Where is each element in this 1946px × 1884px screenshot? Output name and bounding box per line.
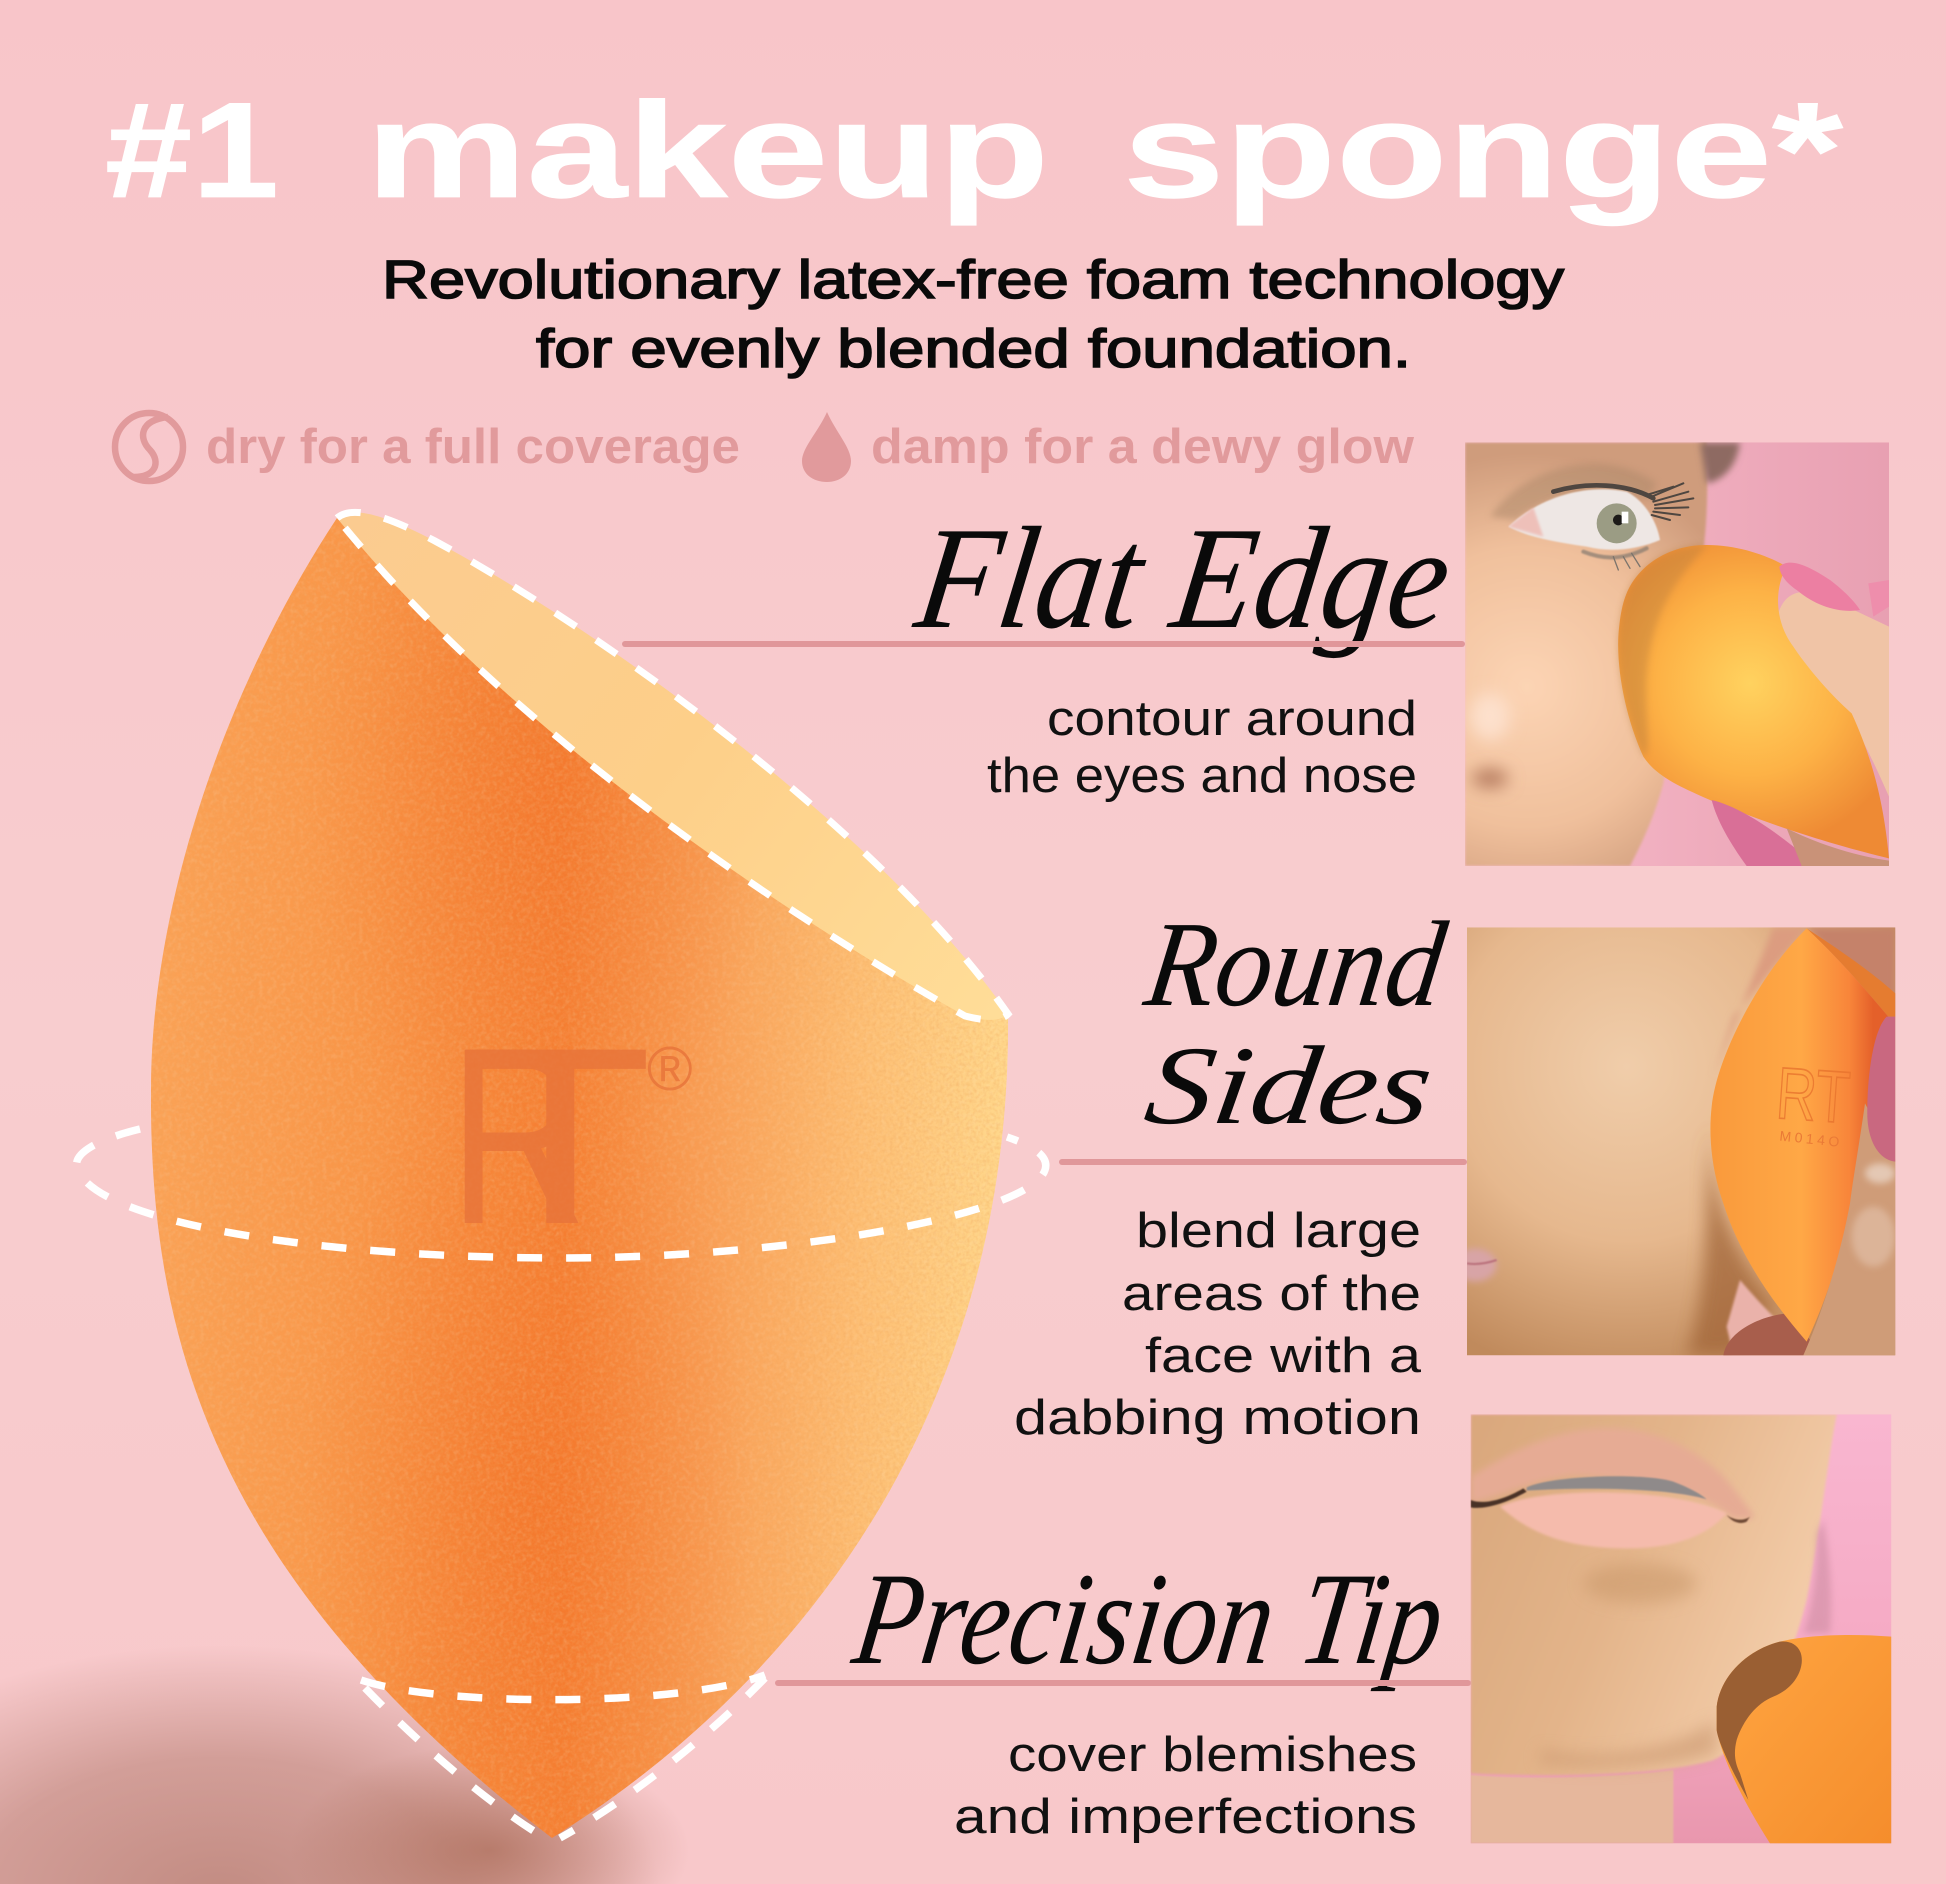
sponge (1618, 545, 1889, 858)
usage tip: dry: dry for a full coverage (206, 420, 740, 474)
flat cut face (337, 512, 1008, 1020)
connector line (622, 641, 1465, 647)
usage tip: damp: damp for a dewy glow (871, 420, 1415, 474)
sponge (1710, 928, 1888, 1342)
connector line (775, 1680, 1471, 1686)
usage tip: dry (115, 413, 740, 481)
nails (1779, 563, 1860, 611)
connector line (1059, 1159, 1467, 1165)
icon: dry sponge circle (115, 413, 183, 481)
face (1471, 1414, 1837, 1775)
usage tip: damp (802, 412, 1415, 482)
sponge shadow (0, 1630, 900, 1884)
lower lip (1500, 1492, 1727, 1548)
icon: water drop (802, 412, 851, 482)
description: face with a (1145, 1329, 1422, 1383)
fingertip (1723, 1313, 1813, 1355)
sponge logo: RT (1774, 1052, 1853, 1139)
description: and imperfections (954, 1790, 1417, 1844)
foundation stain (1717, 1641, 1802, 1800)
RT logo: T (468, 995, 653, 1276)
thumb (1803, 1103, 1895, 1355)
description: cover blemishes (1008, 1728, 1417, 1782)
description: areas of the (1122, 1267, 1421, 1321)
heading: Precision Tip: Precision Tip (845, 1546, 1453, 1692)
sponge back facet (1807, 928, 1895, 1017)
title: makeup (366, 74, 1049, 226)
sponge (1717, 1635, 1891, 1843)
sponge body (140, 510, 1020, 1850)
RT logo: ® (647, 1035, 693, 1104)
photo: eye contour (1465, 442, 1889, 866)
heading: Round Sides (1137, 897, 1454, 1148)
title: #1 (105, 74, 279, 226)
dashed outline: round sides (77, 1129, 1046, 1258)
lip (1467, 1246, 1500, 1285)
eyelashes (1553, 483, 1693, 570)
description: dabbing motion (1014, 1391, 1421, 1445)
description: blend large (1136, 1204, 1421, 1258)
callout: flat edge (622, 497, 1465, 803)
description (987, 692, 1417, 803)
sponge illustration (77, 510, 1046, 1850)
teeth and mouth line (1527, 1476, 1707, 1499)
dashed outline: flat edge (337, 512, 1008, 1020)
photo: lips and chin (1471, 1414, 1891, 1843)
photo: cheek blending (1453, 927, 1895, 1355)
nail (1867, 1017, 1895, 1162)
heading: Round Sides: Round (1137, 897, 1454, 1032)
chin shading (1583, 1563, 1697, 1603)
upper lip (1471, 1428, 1755, 1518)
finger and nail (1778, 592, 1889, 797)
description (1014, 1204, 1422, 1445)
skin (1465, 442, 1707, 866)
subtitle (382, 250, 1564, 379)
neck (1471, 1770, 1673, 1843)
heading: Round Sides: Sides (1139, 1024, 1440, 1148)
heading: Flat Edge: Flat Edge (907, 497, 1460, 659)
callout: precision tip (775, 1546, 1471, 1844)
subtitle: for evenly blended foundation. (536, 319, 1411, 379)
description: contour around (1047, 692, 1417, 746)
subtitle: Revolutionary latex-free foam technology (382, 250, 1564, 310)
photo: cheek blending: M014O (1779, 1128, 1840, 1150)
callout: round sides (1014, 897, 1467, 1445)
title (105, 74, 1843, 226)
eye (1490, 464, 1657, 520)
background behind sponge (1808, 927, 1896, 1014)
RT logo: R (449, 996, 587, 1277)
dashed outline: precision tip (361, 1675, 765, 1838)
nose (1470, 693, 1510, 740)
shadow by sponge (1687, 1123, 1773, 1355)
title: sponge* (1123, 74, 1843, 226)
description (954, 1728, 1417, 1844)
description: the eyes and nose (987, 749, 1417, 803)
